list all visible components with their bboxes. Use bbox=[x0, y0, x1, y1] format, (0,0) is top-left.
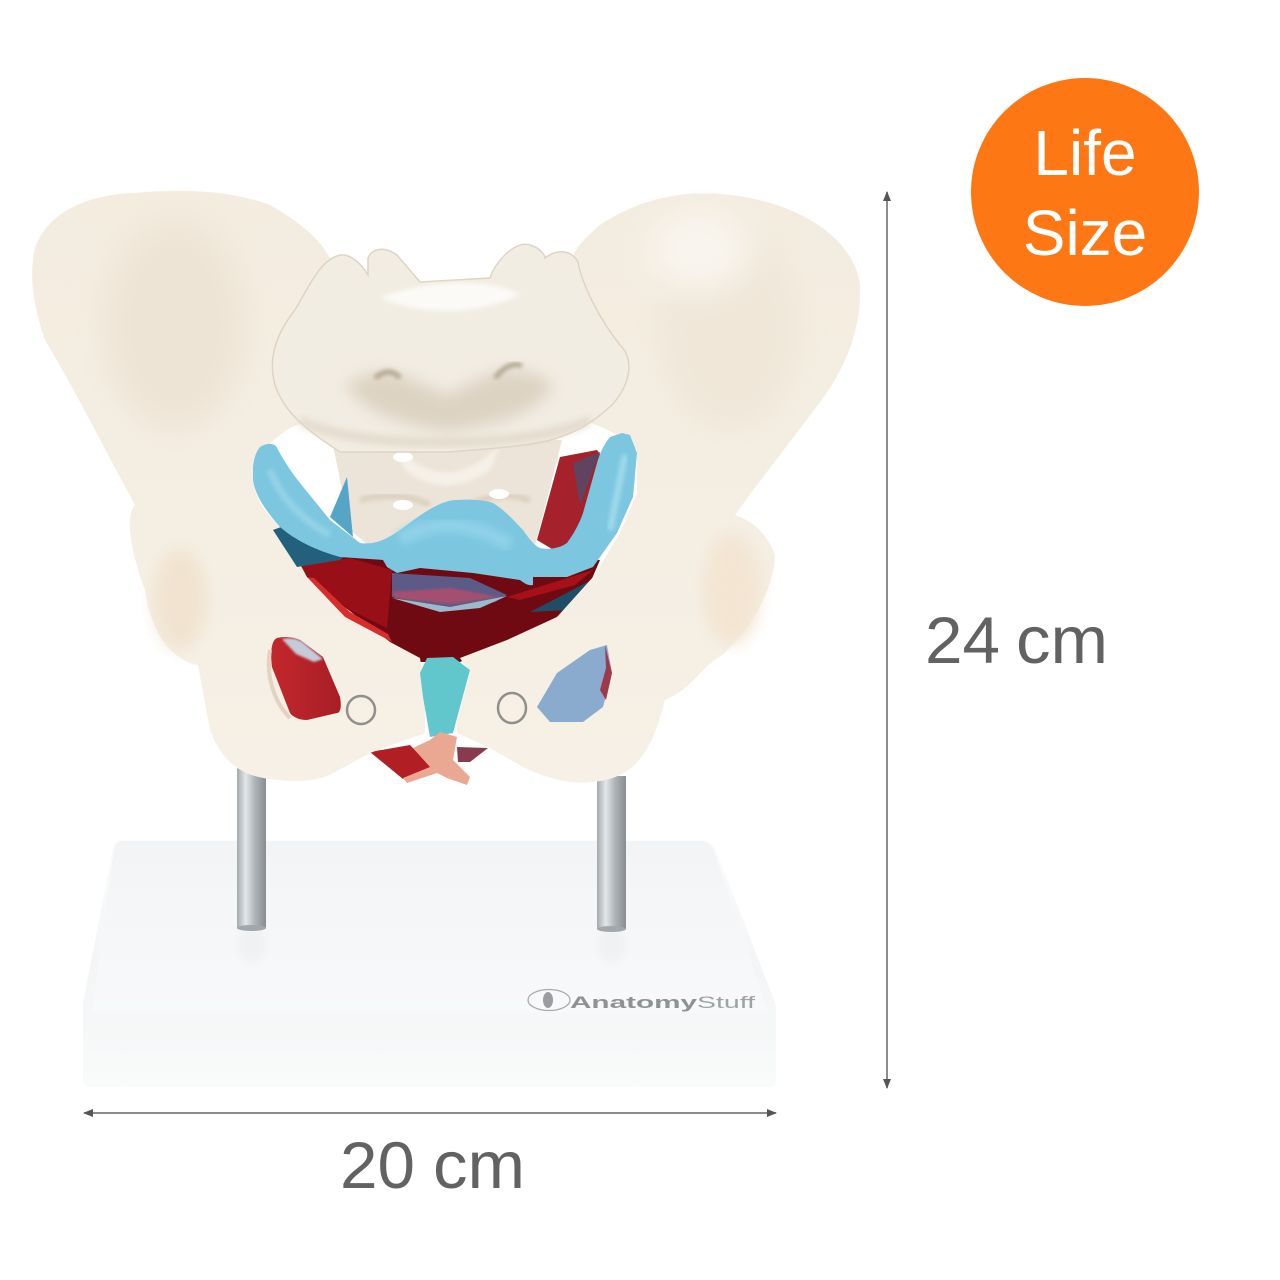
right red pelvic muscle bbox=[537, 450, 612, 552]
central teal structure bbox=[420, 657, 470, 737]
support rods bbox=[237, 768, 626, 932]
left obturator muscle bbox=[269, 637, 341, 720]
wire rings bbox=[347, 693, 526, 724]
width dimension line bbox=[84, 1112, 776, 1114]
life size badge: Size bbox=[1023, 197, 1147, 269]
brand logo on base bbox=[528, 990, 755, 1012]
brand logo on base: Stuff bbox=[697, 993, 755, 1012]
sacral foramen bbox=[489, 489, 509, 499]
sacral foramen bbox=[393, 452, 413, 462]
deep red pelvic floor muscles bbox=[285, 535, 600, 662]
height label: cm bbox=[1016, 603, 1108, 678]
organ section bbox=[392, 573, 507, 612]
height label bbox=[925, 603, 1108, 678]
red and blue structure under pubis bbox=[370, 745, 488, 779]
pink external structure bbox=[403, 732, 470, 785]
width label: 20 bbox=[340, 1128, 415, 1202]
height dimension line bbox=[886, 192, 888, 1088]
sacrum lower part bbox=[332, 440, 562, 545]
pelvis model bbox=[32, 191, 860, 785]
model stand base bbox=[83, 840, 776, 1087]
left hip bone bbox=[32, 191, 425, 781]
life size badge bbox=[971, 78, 1199, 306]
sacral foramen bbox=[393, 500, 413, 510]
blue levator muscles bbox=[253, 433, 637, 585]
width label bbox=[340, 1128, 525, 1203]
brand logo on base: Anatomy bbox=[570, 993, 698, 1012]
width label: cm bbox=[433, 1128, 525, 1203]
height label: 24 bbox=[925, 603, 1000, 677]
right obturator muscle bbox=[537, 645, 612, 722]
life size badge: Life bbox=[1033, 117, 1137, 189]
sacrum upper part bbox=[272, 244, 629, 452]
right hip bone bbox=[457, 193, 860, 783]
